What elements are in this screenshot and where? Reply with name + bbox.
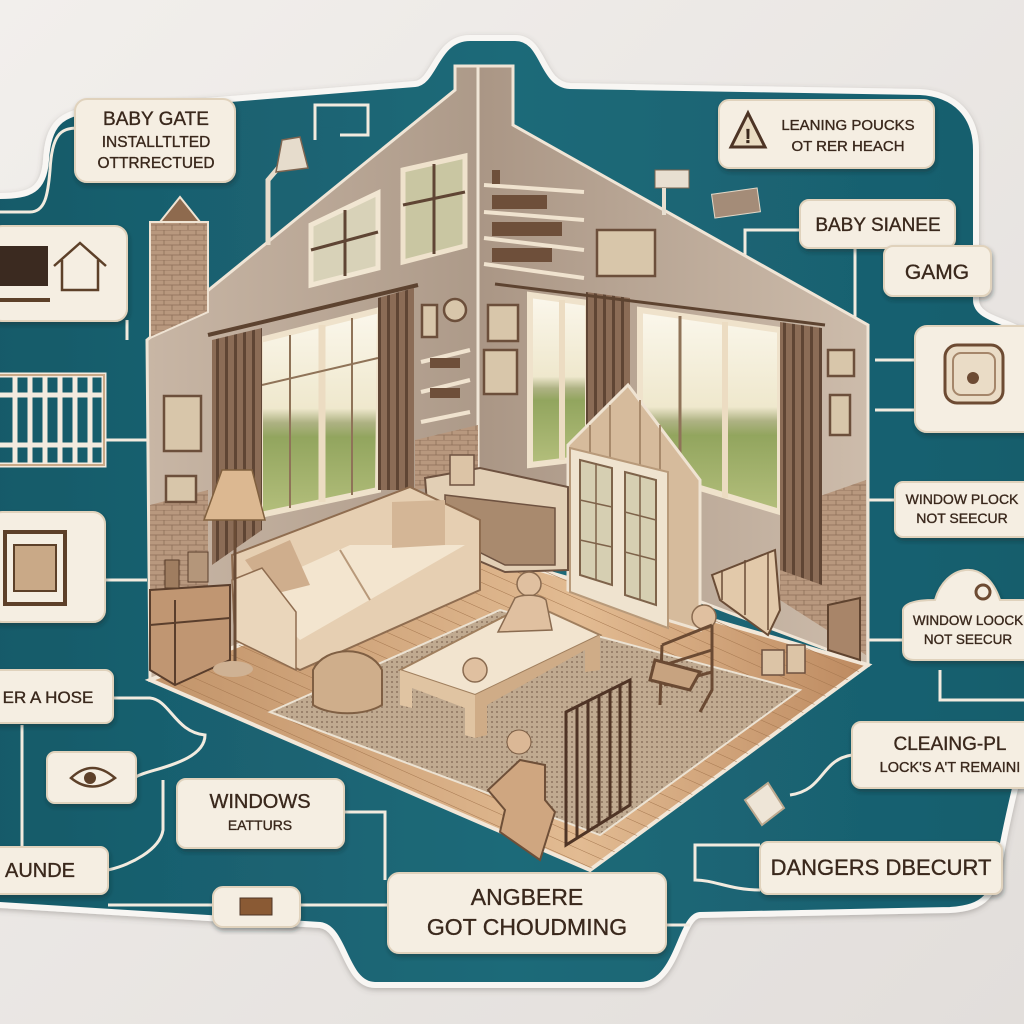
icon: lock plate bbox=[945, 345, 1003, 403]
label: windows features: EATTURS bbox=[228, 817, 292, 833]
curtains left bbox=[212, 328, 262, 565]
label: r a hose: ER A HOSE bbox=[3, 688, 93, 707]
house bbox=[147, 66, 868, 870]
wall: left bbox=[147, 66, 478, 680]
label: cleaning plugs: LOCK'S A'T REMAINI bbox=[880, 760, 1020, 776]
card: monitor and house bbox=[0, 226, 127, 321]
shelves bbox=[421, 185, 584, 422]
label: aunde bbox=[0, 847, 108, 894]
window: upper small bbox=[311, 193, 378, 285]
sign on post bbox=[655, 170, 760, 218]
label: window looks bbox=[903, 570, 1024, 660]
icon: house bbox=[54, 243, 106, 290]
outside chimney tower bbox=[150, 197, 208, 338]
jars bbox=[450, 455, 805, 675]
window: back right bbox=[640, 310, 780, 512]
label: window plock bbox=[895, 482, 1024, 537]
console table bbox=[425, 468, 568, 572]
baby gate bbox=[566, 680, 630, 845]
label: dangers: DANGERS DBECURT bbox=[771, 855, 991, 880]
label: cleaning pouches: LEANING POUCKS bbox=[781, 117, 915, 134]
floor bbox=[150, 552, 868, 870]
label: window plock: WINDOW PLOCK bbox=[906, 491, 1019, 507]
toy house and child bbox=[488, 730, 555, 860]
brick base areas bbox=[150, 490, 208, 620]
sofa bbox=[232, 487, 480, 670]
icon: small tag bbox=[745, 783, 784, 825]
windows left bbox=[260, 156, 465, 515]
cabinet bbox=[828, 598, 860, 660]
label: aunde: AUNDE bbox=[5, 860, 75, 882]
label: small plate bbox=[213, 887, 300, 927]
side table bbox=[150, 552, 230, 685]
icon: warning triangle bbox=[731, 113, 765, 147]
french door bbox=[568, 385, 700, 630]
coffee table bbox=[400, 603, 600, 738]
icon: eye bbox=[976, 585, 990, 599]
label: cleaning pouches: OT RER HEACH bbox=[791, 138, 905, 155]
label: cleaning pouches: ! bbox=[745, 126, 751, 148]
label: r a hose bbox=[0, 670, 113, 723]
card: plan icon bbox=[0, 512, 105, 622]
window: left large bbox=[260, 310, 380, 515]
floor lamp bbox=[204, 470, 265, 677]
curtains right bbox=[586, 292, 630, 440]
label: anger: GOT CHOUDMING bbox=[427, 914, 627, 940]
label: cleaning plugs: CLEAING-PL bbox=[894, 734, 1006, 755]
label: anger bbox=[388, 873, 666, 953]
icon: eye bbox=[71, 768, 115, 786]
wall: right bbox=[478, 66, 868, 665]
label: gamg: GAMG bbox=[905, 261, 969, 284]
label: anger: ANGBERE bbox=[471, 884, 583, 910]
label: baby gate: BABY GATE bbox=[103, 109, 209, 130]
label: baby gate: OTTRRECTUED bbox=[97, 155, 215, 172]
card: crib gate bbox=[0, 375, 104, 465]
label: window looks: NOT SEECUR bbox=[924, 632, 1012, 647]
cradle / side chair bbox=[712, 550, 780, 635]
label: baby gate: INSTALLTLTED bbox=[102, 134, 210, 151]
window: upper tall bbox=[403, 156, 465, 262]
label: baby gate bbox=[75, 99, 235, 182]
label: cleaning pouches bbox=[719, 100, 934, 168]
label: baby sianee: BABY SIANEE bbox=[815, 215, 941, 236]
label: dangers bbox=[760, 842, 1002, 894]
label: baby sianee bbox=[800, 200, 955, 248]
label: cleaning plugs bbox=[852, 722, 1024, 788]
ottoman bbox=[313, 651, 382, 713]
icon: monitor bbox=[0, 246, 48, 286]
window: back left bbox=[530, 295, 588, 465]
small chair bbox=[650, 625, 712, 712]
windows right bbox=[530, 295, 780, 512]
label: window plock: NOT SEECUR bbox=[916, 510, 1008, 526]
label: window looks: WINDOW LOOCK bbox=[913, 613, 1023, 628]
label: windows features bbox=[177, 779, 344, 848]
label: windows features: WINDOWS bbox=[209, 791, 311, 813]
card: lock icon bbox=[915, 326, 1024, 432]
floor lamp exterior bbox=[268, 137, 308, 245]
child figure bbox=[463, 572, 716, 682]
rug bbox=[270, 610, 800, 835]
wall frames bbox=[164, 230, 854, 502]
card: eye bbox=[47, 752, 136, 803]
label: gamg bbox=[884, 246, 991, 296]
